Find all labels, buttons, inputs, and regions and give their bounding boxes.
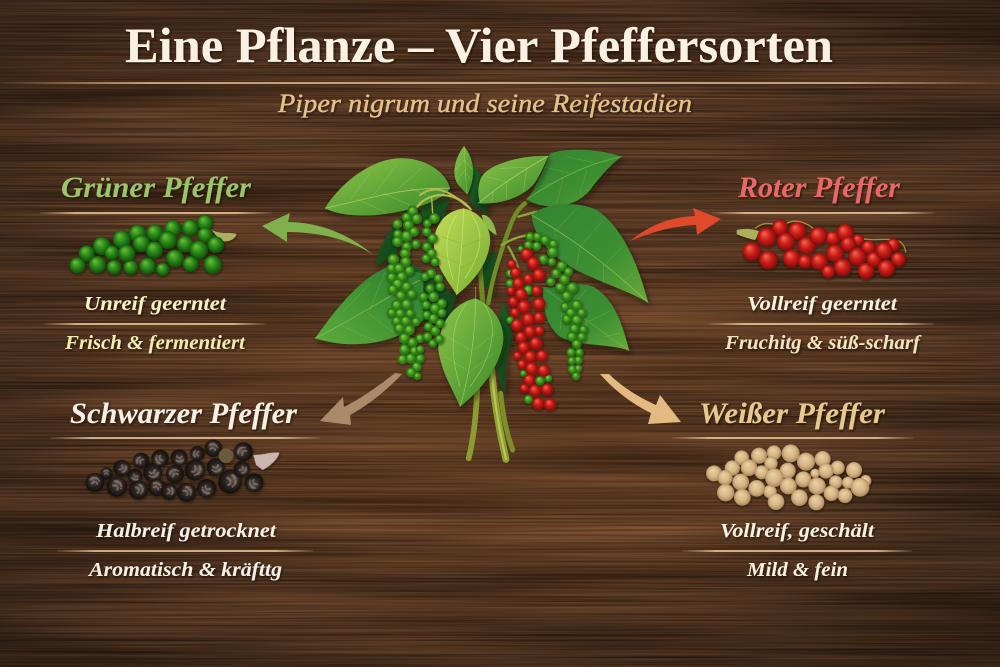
arrow to red pepper	[630, 208, 721, 241]
heading: green pepper: Grüner Pfeffer	[61, 171, 251, 204]
small side leaf	[482, 215, 497, 235]
black peppercorn cluster	[86, 438, 279, 505]
upper left leaf	[325, 158, 450, 215]
title: Eine Pflanze – Vier Pfeffersorten	[125, 17, 833, 73]
arrow to white pepper	[600, 374, 681, 424]
vine arcs	[417, 189, 471, 213]
back leaves	[375, 165, 511, 397]
right big leaf	[532, 204, 648, 303]
lower left leaf	[315, 267, 423, 344]
green peppercorn cluster	[69, 215, 237, 276]
panel: white pepper	[672, 397, 914, 581]
subtitle: Piper nigrum und seine Reifestadien	[277, 89, 692, 118]
heading: white pepper: Weißer Pfeffer	[699, 397, 885, 430]
top right leaf	[527, 150, 622, 206]
green flavour label: Frisch & fermentiert	[64, 332, 247, 354]
panel: red pepper	[708, 171, 934, 354]
green pepper spike 2	[419, 214, 446, 347]
heading: red pepper: Roter Pfeffer	[737, 171, 900, 204]
red label rule	[708, 323, 934, 325]
panel: black pepper	[50, 397, 320, 581]
title rule	[0, 82, 1000, 84]
red flavour label: Fruchitg & süß-scharf	[724, 332, 922, 354]
panel: green pepper	[40, 171, 272, 354]
red pepper spike	[506, 246, 556, 410]
green label rule	[44, 323, 266, 325]
white label rule	[682, 550, 912, 552]
central pepper plant illustration	[315, 146, 648, 459]
heading: black pepper: Schwarzer Pfeffer	[70, 397, 297, 430]
white peppercorn cluster	[706, 444, 871, 510]
green pepper spike 3	[524, 233, 587, 380]
green heading rule	[40, 212, 272, 214]
black maturity label: Halbreif getrocknet	[95, 520, 278, 542]
black label rule	[57, 550, 313, 552]
right lower leaf	[543, 284, 629, 351]
green pepper spike 1	[387, 206, 424, 379]
stems	[480, 203, 537, 370]
center leaf	[434, 208, 490, 295]
top middle leaf	[478, 156, 548, 204]
white flavour label: Mild & fein	[746, 559, 848, 581]
white heading rule	[672, 437, 914, 439]
red maturity label: Vollreif geerntet	[747, 293, 899, 315]
red peppercorn cluster	[737, 220, 906, 279]
lower stems	[469, 370, 513, 459]
red heading rule	[712, 212, 934, 214]
arrow to black pepper	[320, 373, 402, 425]
arrow to green pepper	[262, 213, 372, 254]
small top leaf	[454, 146, 473, 195]
lower center leaf	[438, 287, 503, 407]
black flavour label: Aromatisch & kräfttg	[87, 559, 282, 581]
black heading rule	[50, 437, 320, 439]
white maturity label: Vollreif, geschält	[720, 520, 876, 542]
green maturity label: Unreif geerntet	[84, 293, 228, 315]
